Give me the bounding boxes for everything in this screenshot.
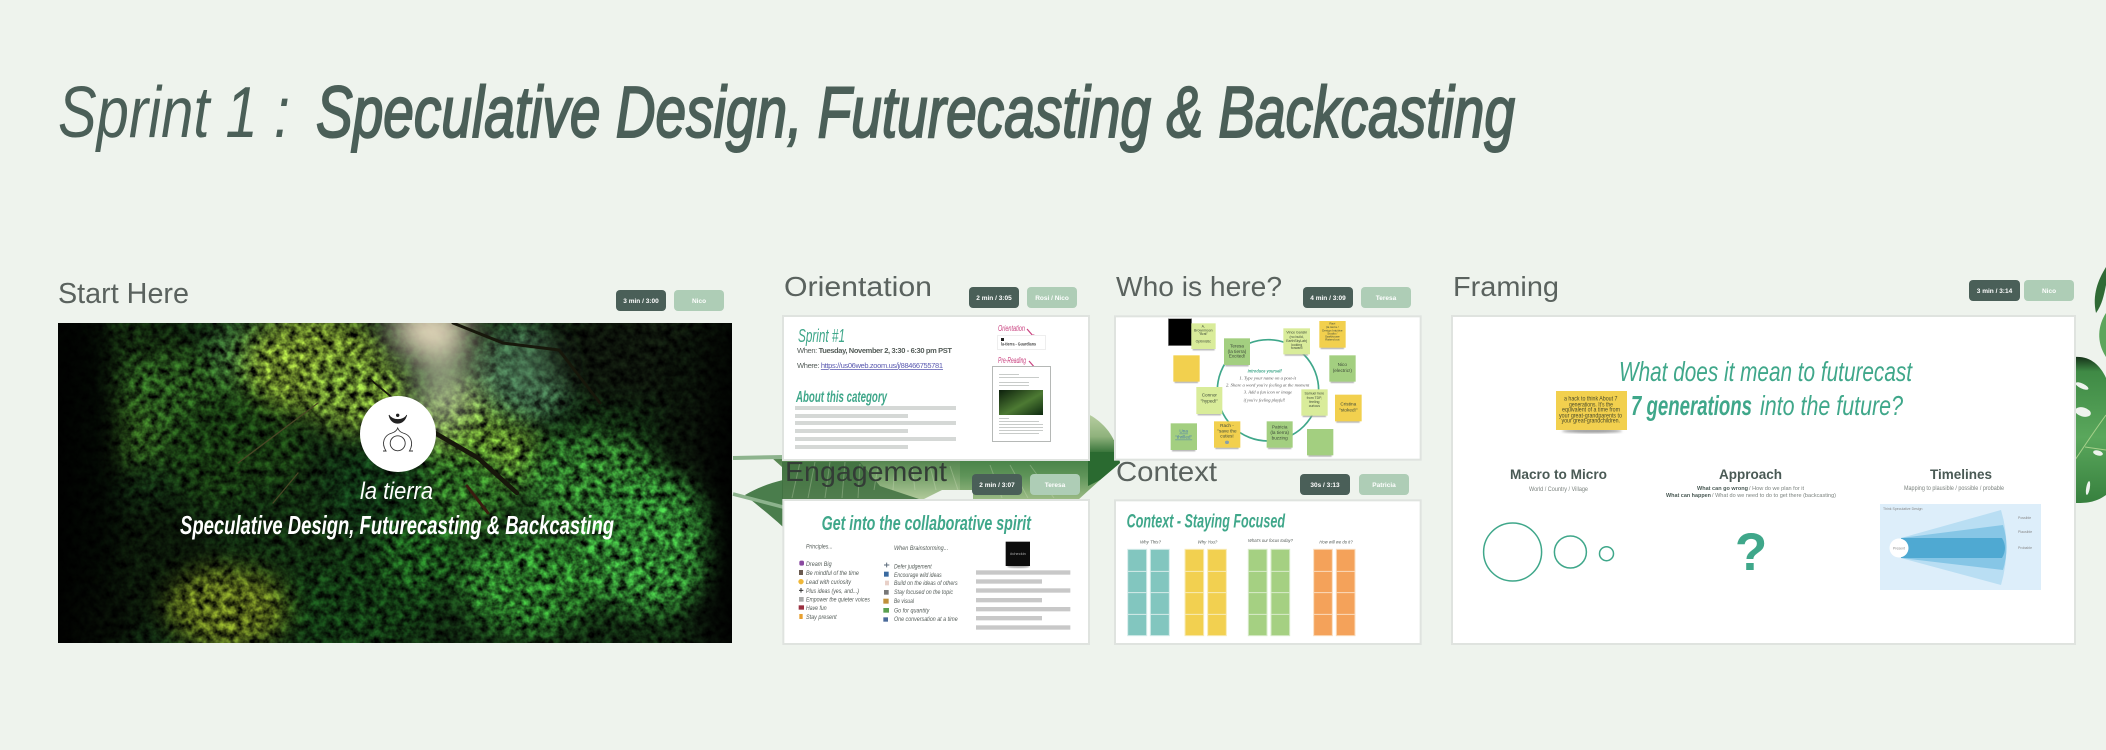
principles column: Dream Big xyxy=(806,561,832,568)
sticky notes: (la tierra / xyxy=(1326,325,1339,329)
brainstorming column: Build on the ideas of others xyxy=(894,580,958,587)
slide title: Context - Staying Focused xyxy=(1127,511,1286,532)
presenter badge xyxy=(674,290,724,311)
forest cover slide xyxy=(58,323,732,643)
principles column: Empower the quieter voices xyxy=(806,596,871,603)
where line: Where: https://us06web.zoom.us/j/88466755781 xyxy=(797,361,943,370)
presenter badge: Teresa xyxy=(1376,295,1397,302)
introductions text: 1. Type your name on a post-it xyxy=(1239,376,1297,381)
macro to micro column xyxy=(1484,466,1614,581)
question line 2: 7 generations xyxy=(1631,390,1752,421)
sticky notes: feeling xyxy=(1309,400,1320,404)
time badge xyxy=(972,474,1022,495)
panel: context xyxy=(1115,456,1421,644)
principles column: Principles... xyxy=(806,543,833,550)
macro to micro column: World / Country / Village xyxy=(1529,486,1588,493)
heading: start here: Start Here xyxy=(58,278,189,310)
introductions text: Introduce yourself xyxy=(1248,369,1282,374)
heading: orientation: Orientation xyxy=(784,271,932,302)
la tierra wordmark: la tierra xyxy=(360,478,433,505)
decorative banana leaf behind the panels xyxy=(733,414,1120,527)
timelines column xyxy=(1880,466,2041,590)
sticky notes: forward xyxy=(1291,346,1303,350)
introductions text xyxy=(1226,369,1310,403)
sticky notes: Vince Ganski xyxy=(1286,331,1307,335)
slide title: Get into the collaborative spirit xyxy=(822,512,1032,535)
presenter badge: Patricia xyxy=(1372,482,1396,489)
time badge xyxy=(1303,287,1353,308)
sticky notes: looking xyxy=(1291,343,1302,347)
approach column: / What do we need to do to get there (backcasting) xyxy=(1712,493,1836,499)
presenter badge xyxy=(2024,280,2074,301)
pre-reading note xyxy=(992,356,1050,442)
principles column: Plus ideas (yes, and...) xyxy=(806,588,859,595)
approach column: / How do we plan for it xyxy=(1749,486,1804,492)
when line: When: Tuesday, November 2, 3:30 - 6:30 pm PST xyxy=(797,346,952,355)
approach column: What can happen xyxy=(1666,493,1712,499)
time badge: 30s / 3:13 xyxy=(1310,482,1340,489)
futures cone chart: Plausible xyxy=(2018,530,2032,534)
futures cone chart: Think Speculative Design xyxy=(1883,507,1923,511)
sticky notes: Optimistic xyxy=(1196,340,1211,344)
slide xyxy=(1452,316,2075,644)
sticky notes: cuties! xyxy=(1220,434,1234,439)
principles column: Have fun xyxy=(806,605,827,612)
sticky notes: curious xyxy=(1309,404,1320,408)
brainstorming column xyxy=(883,545,958,623)
logo xyxy=(360,396,436,472)
column labels: Why You? xyxy=(1198,539,1218,545)
orientation note: Orientation xyxy=(998,324,1025,333)
presenter badge xyxy=(1359,474,1409,495)
title: Sprint 1 : xyxy=(58,73,290,153)
question line 2 xyxy=(1631,390,1903,421)
green circle xyxy=(1217,340,1319,441)
slide xyxy=(783,316,1089,460)
heading: context: Context xyxy=(1116,456,1217,487)
sticky notes: Patricia xyxy=(1272,425,1288,430)
sticky notes: EarthSkyLab) xyxy=(1286,339,1307,343)
brainstorming column: Go for quantity xyxy=(894,607,930,614)
heading: engagement: Engagement xyxy=(785,456,947,487)
column labels: How will we do it? xyxy=(1319,539,1353,545)
sticky notes: (la tierra) xyxy=(1228,349,1247,354)
question line 1: What does it mean to futurecast xyxy=(1619,356,1913,387)
yellow sticky note: a hack to think About 7 xyxy=(1564,396,1618,402)
timelines column: Timelines xyxy=(1930,466,1992,482)
slide xyxy=(783,500,1089,644)
teal sticky columns xyxy=(1128,549,1169,636)
heading: who is here: Who is here? xyxy=(1116,271,1282,302)
time badge: 3 min / 3:00 xyxy=(623,298,659,305)
presenter badge: Teresa xyxy=(1045,482,1066,489)
timelines column: Mapping to plausible / possible / probable xyxy=(1904,485,2004,492)
time badge: 2 min / 3:07 xyxy=(979,482,1015,489)
orientation note xyxy=(998,324,1046,350)
principles column: Lead with curiosity xyxy=(806,579,852,586)
sticky notes: (la tierra) xyxy=(1270,430,1289,435)
futures cone chart: Present xyxy=(1893,546,1905,550)
checkin sticky: #checkin xyxy=(1010,551,1026,556)
sticky notes: "Brat" xyxy=(1199,332,1209,336)
yellow sticky note xyxy=(1556,391,1627,433)
sticky notes: Samuel here xyxy=(1304,392,1324,396)
brainstorming column: Defer judgement xyxy=(894,563,933,570)
sticky notes: Excited! xyxy=(1229,354,1245,359)
orange sticky columns xyxy=(1314,549,1355,636)
title xyxy=(58,73,1515,153)
slide xyxy=(1115,316,1421,460)
checkin sticky xyxy=(1006,542,1030,568)
sticky notes: Rach - xyxy=(1220,423,1234,428)
sticky notes: Saskhouse xyxy=(1325,335,1340,339)
panel: who is here xyxy=(1115,271,1421,460)
panel: start here xyxy=(58,282,732,643)
redacted text bars xyxy=(976,570,1070,630)
futures cone chart: Probable xyxy=(2018,546,2032,550)
yellow sticky note: equivalent of a time from xyxy=(1562,408,1620,414)
panel: orientation xyxy=(783,271,1089,460)
sticky notes: Studio / xyxy=(1327,332,1338,336)
presenter badge: Rosi / Nico xyxy=(1035,295,1069,302)
orientation note: la-tierra - Guardians xyxy=(1001,342,1037,346)
approach column xyxy=(1666,466,1836,582)
sticky notes: Connor xyxy=(1202,393,1217,398)
heading: framing: Framing xyxy=(1453,271,1559,302)
approach column: What can go wrong xyxy=(1697,486,1748,492)
sticky notes: "thrilled" xyxy=(1175,435,1193,440)
sticky notes: Una xyxy=(1179,429,1188,434)
column labels: Why This? xyxy=(1140,539,1161,545)
sticky notes: Design Intuitive xyxy=(1322,328,1343,332)
macro to micro column: Macro to Micro xyxy=(1510,466,1607,482)
about heading: About this category xyxy=(795,389,888,406)
sticky notes: "stoked!" xyxy=(1339,408,1358,413)
sticky notes xyxy=(1168,319,1362,457)
approach column: ? xyxy=(1735,523,1767,582)
introductions text: 3. Add a fun icon or image xyxy=(1244,390,1292,395)
sticky notes: Cristina xyxy=(1340,402,1357,407)
question line 2: into the future? xyxy=(1760,390,1903,421)
principles column: Stay present xyxy=(806,614,838,621)
brainstorming column: When Brainstorming... xyxy=(894,545,948,552)
cover subtitle: Speculative Design, Futurecasting & Backcasting xyxy=(180,510,614,540)
title: Speculative Design, Futurecasting & Backcasting xyxy=(316,73,1515,153)
sticky notes: Raised out xyxy=(1325,338,1340,342)
panel: engagement xyxy=(783,456,1089,644)
time badge xyxy=(1300,474,1350,495)
presenter badge xyxy=(1361,287,1411,308)
sticky notes: "hyped!" xyxy=(1201,399,1218,404)
yellow sticky columns xyxy=(1185,549,1226,636)
time badge xyxy=(969,287,1019,308)
sticky notes: A, xyxy=(1202,325,1205,329)
yellow sticky note: generations. It's the xyxy=(1569,402,1614,408)
green sticky columns xyxy=(1248,549,1290,636)
principles column xyxy=(798,543,871,621)
time badge xyxy=(616,290,666,311)
sticky notes: from TDP, xyxy=(1307,396,1322,400)
presenter badge: Nico xyxy=(2042,288,2056,295)
time badge: 3 min / 3:14 xyxy=(1977,288,2013,295)
column labels xyxy=(1140,538,1353,545)
approach column: Approach xyxy=(1719,466,1782,482)
sticky notes: Brownmoon xyxy=(1194,328,1213,332)
time badge: 4 min / 3:09 xyxy=(1310,295,1346,302)
futures cone chart xyxy=(1880,504,2041,590)
time badge: 2 min / 3:05 xyxy=(976,295,1012,302)
column labels: What's our focus today? xyxy=(1248,538,1293,544)
redacted text bars xyxy=(795,406,956,449)
introductions text: 2. Share a word you're feeling at the moment xyxy=(1226,383,1310,388)
brainstorming column: Encourage wild ideas xyxy=(894,572,942,579)
sticky notes: buzzing xyxy=(1272,436,1288,441)
panel: framing xyxy=(1452,271,2075,644)
futures cone chart: Possible xyxy=(2018,516,2031,520)
yellow sticky note: your great-grandparents to xyxy=(1559,414,1623,420)
slide xyxy=(1115,500,1421,644)
presenter badge: Nico xyxy=(692,298,706,305)
pre-reading note: Pre-Reading xyxy=(998,356,1026,365)
sticky notes: Ravi xyxy=(1329,322,1336,326)
introductions text: if you're feeling playful! xyxy=(1243,398,1286,403)
principles column: Be mindful of the time xyxy=(806,570,859,577)
sprint heading: Sprint #1 xyxy=(798,326,845,346)
presenter badge xyxy=(1030,474,1080,495)
decorative monstera leaf at right edge xyxy=(2074,267,2106,503)
sticky notes: (electric!) xyxy=(1333,368,1352,373)
sticky notes: "save the xyxy=(1217,429,1237,434)
brainstorming column: Stay focused on the topic xyxy=(894,589,954,596)
time badge xyxy=(1969,280,2020,301)
yellow sticky note: your great-grandchildren. xyxy=(1562,418,1620,424)
presenter badge xyxy=(1027,287,1077,308)
brainstorming column: Be visual xyxy=(894,598,914,605)
sticky notes: Nico xyxy=(1338,362,1347,367)
sticky notes: (no build, xyxy=(1289,335,1304,339)
brainstorming column: One conversation at a time xyxy=(894,616,958,623)
sticky notes: Teresa xyxy=(1230,343,1244,348)
